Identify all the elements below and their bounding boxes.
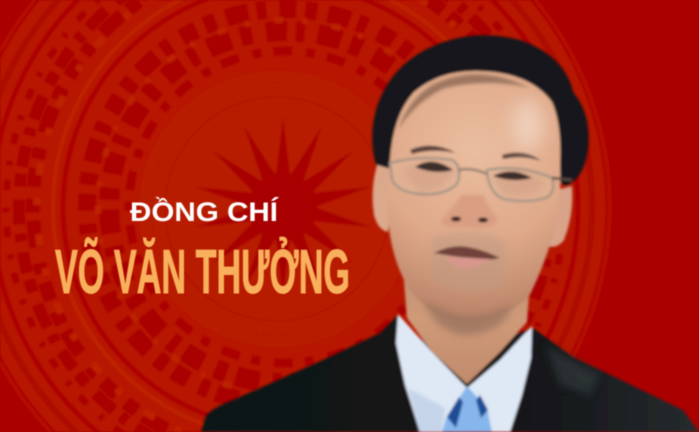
right ear [548,186,572,247]
suit shoulder sheen [545,345,600,395]
text: ĐỒNG CHÍ: ĐỒNG CHÍ [130,196,280,227]
portrait photo [201,35,699,432]
hairline shading [398,74,530,130]
suit jacket [201,315,699,432]
necktie [442,386,492,432]
face [387,71,560,322]
neck [403,255,532,384]
left ear [373,165,394,232]
drum inner disc [139,71,415,347]
nose [441,195,498,228]
eye sockets [402,161,546,197]
eyes [415,162,453,172]
glasses [390,158,572,201]
chin shading [425,300,512,335]
drum star [192,116,374,298]
drum centre: disc and star [139,71,415,347]
mouth [434,246,500,260]
forehead highlight [512,99,544,151]
moustache shadow [432,232,506,291]
hair back [372,35,589,186]
text: VÕ VĂN THƯỞNG: VÕ VĂN THƯỞNG [55,238,350,307]
eyebrows [410,146,456,154]
collar shadow [408,388,445,432]
shirt collar [396,314,532,432]
